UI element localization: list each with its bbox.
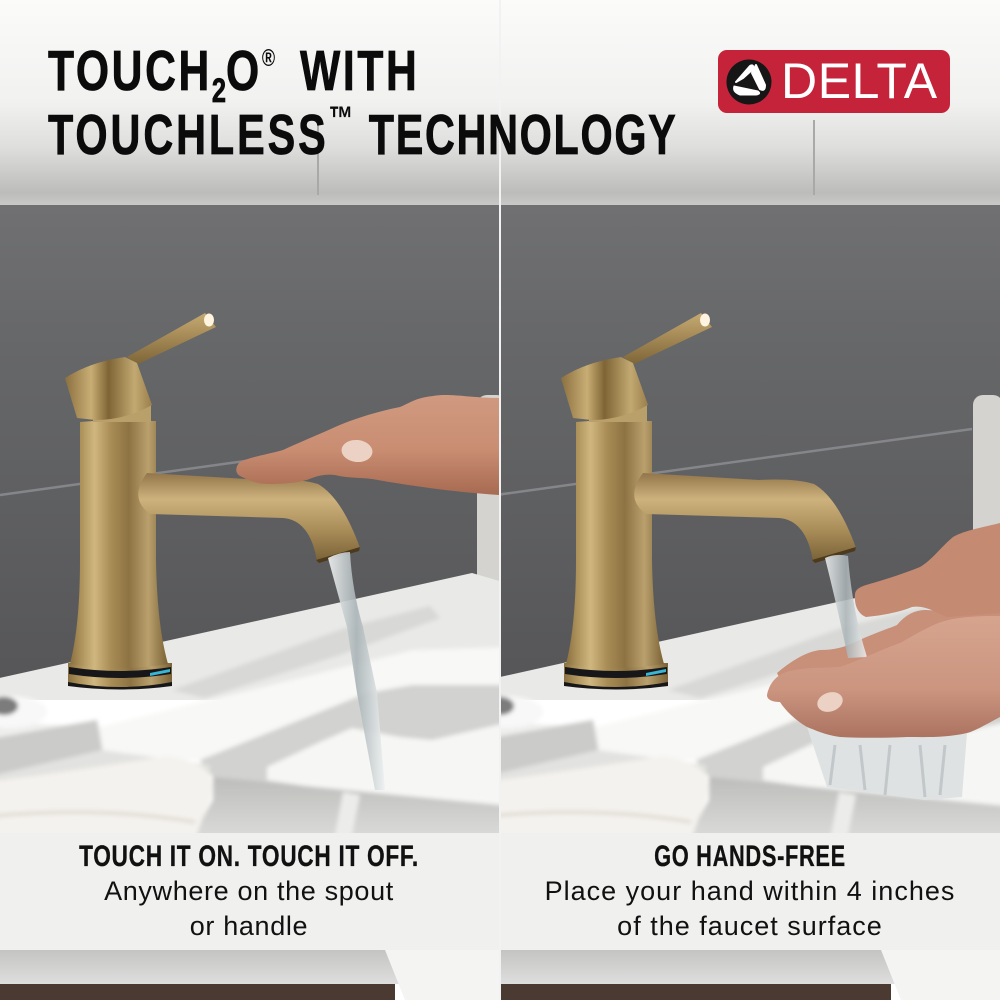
title [48, 39, 677, 167]
splash [807, 727, 967, 800]
upper hand [855, 523, 1000, 617]
logo: Delta [718, 50, 950, 113]
panel: left photo [0, 0, 510, 1000]
logo wordmark: DELTA [781, 53, 938, 109]
caption band left [0, 833, 499, 950]
panel divider [499, 0, 501, 1000]
back fingers [777, 610, 1000, 676]
caption: left [79, 840, 419, 941]
caption band right [501, 833, 1000, 950]
front hand [767, 616, 1000, 738]
caption: right: of the faucet surface [617, 911, 883, 941]
title: TOUCHLESS™ TECHNOLOGY [48, 100, 677, 167]
water stream left [328, 552, 385, 790]
caption: left: TOUCH IT ON. TOUCH IT OFF. [79, 840, 419, 873]
caption: right: Place your hand within 4 inches [545, 876, 955, 906]
icon: delta emblem [726, 60, 772, 104]
hand touching spout [236, 395, 499, 495]
caption: right [545, 840, 955, 941]
title: TOUCH2O® WITH [48, 39, 419, 110]
caption: left: Anywhere on the spout [104, 876, 394, 906]
panel: right photo [469, 0, 1000, 1000]
water stream right [825, 555, 867, 658]
caption: right: GO HANDS-FREE [654, 840, 846, 873]
caption: left: or handle [190, 911, 308, 941]
